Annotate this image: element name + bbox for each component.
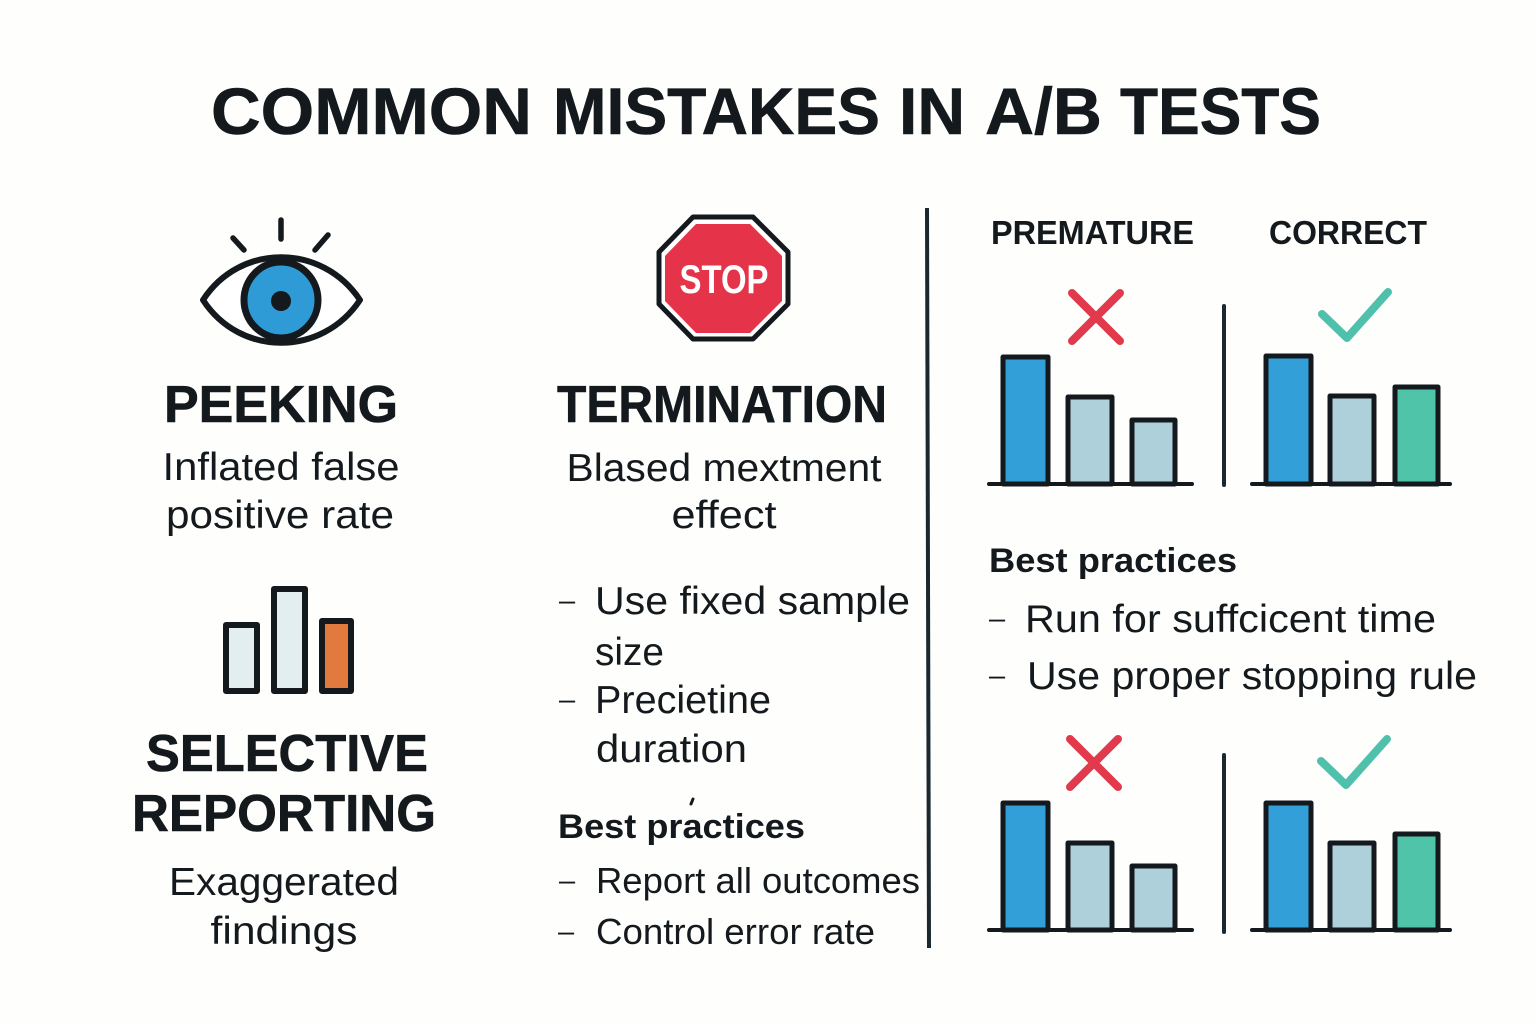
vertical divider [927, 208, 929, 948]
list: right practices: Use proper stopping rule [1027, 655, 1477, 698]
list: fixed sample [559, 580, 910, 771]
list: fixed sample: Use fixed sample [595, 580, 910, 623]
heading: best practices right: Best practices [989, 542, 1237, 580]
icon: green check bottom [1321, 739, 1387, 785]
list: report outcomes: Control error rate [596, 911, 875, 952]
title: COMMON [211, 74, 532, 148]
list: report outcomes: – [559, 865, 576, 897]
text: peeking description: Inflated false [162, 446, 400, 489]
icon: eye [203, 220, 360, 343]
title: A/B [985, 74, 1102, 148]
text: termination description: effect [672, 494, 777, 537]
heading: best practices middle: Best practices [558, 808, 805, 846]
list: right practices: – [989, 603, 1006, 635]
icon: red cross bottom [1070, 739, 1118, 787]
list: fixed sample: – [559, 585, 576, 617]
chart: correct bottom [1252, 803, 1450, 930]
list: fixed sample: size [595, 631, 664, 674]
list: right practices: Run for suffcicent time [1025, 598, 1436, 641]
list: fixed sample: – [559, 684, 576, 716]
list: right practices [989, 598, 1477, 698]
heading: termination: TERMINATION [557, 376, 887, 434]
text: termination description: Blased mextment [566, 447, 882, 490]
icon: green check top [1322, 292, 1388, 338]
list: report outcomes [558, 860, 920, 952]
label: premature: PREMATURE [991, 214, 1194, 251]
chart: correct top [1252, 356, 1450, 484]
list: report outcomes: – [558, 916, 575, 948]
chart: premature top [989, 357, 1192, 484]
panel: selective reporting [132, 589, 436, 953]
title: IN [899, 74, 965, 148]
text: selective reporting description [169, 861, 399, 953]
title: TESTS [1120, 74, 1321, 148]
icon: small bar chart [226, 589, 351, 691]
title [211, 74, 1321, 148]
text: selective reporting description: Exaggerated [169, 861, 399, 904]
icon: stop sign [659, 217, 788, 339]
icon: stop sign: STOP [680, 258, 768, 302]
heading: peeking: PEEKING [164, 376, 398, 434]
title: MISTAKES [553, 74, 880, 148]
heading: selective reporting line two: REPORTING [132, 785, 436, 843]
icon: red cross top [1072, 293, 1120, 341]
text: peeking description: positive rate [166, 494, 394, 537]
panel: peeking [162, 220, 400, 537]
text: termination description [566, 447, 882, 537]
chart divider bottom [1222, 755, 1226, 932]
text: peeking description [162, 446, 400, 537]
label: correct: CORRECT [1269, 214, 1427, 251]
text: selective reporting description: findings [210, 910, 358, 953]
list: report outcomes: Report all outcomes [596, 860, 920, 901]
panel: termination [557, 217, 887, 537]
list: right practices: – [989, 660, 1006, 692]
list: fixed sample: duration [596, 728, 747, 771]
chart: premature bottom [989, 803, 1192, 930]
list: fixed sample: Precietine [595, 679, 771, 722]
heading: selective reporting: SELECTIVE [146, 725, 428, 783]
chart divider top [1222, 306, 1226, 485]
